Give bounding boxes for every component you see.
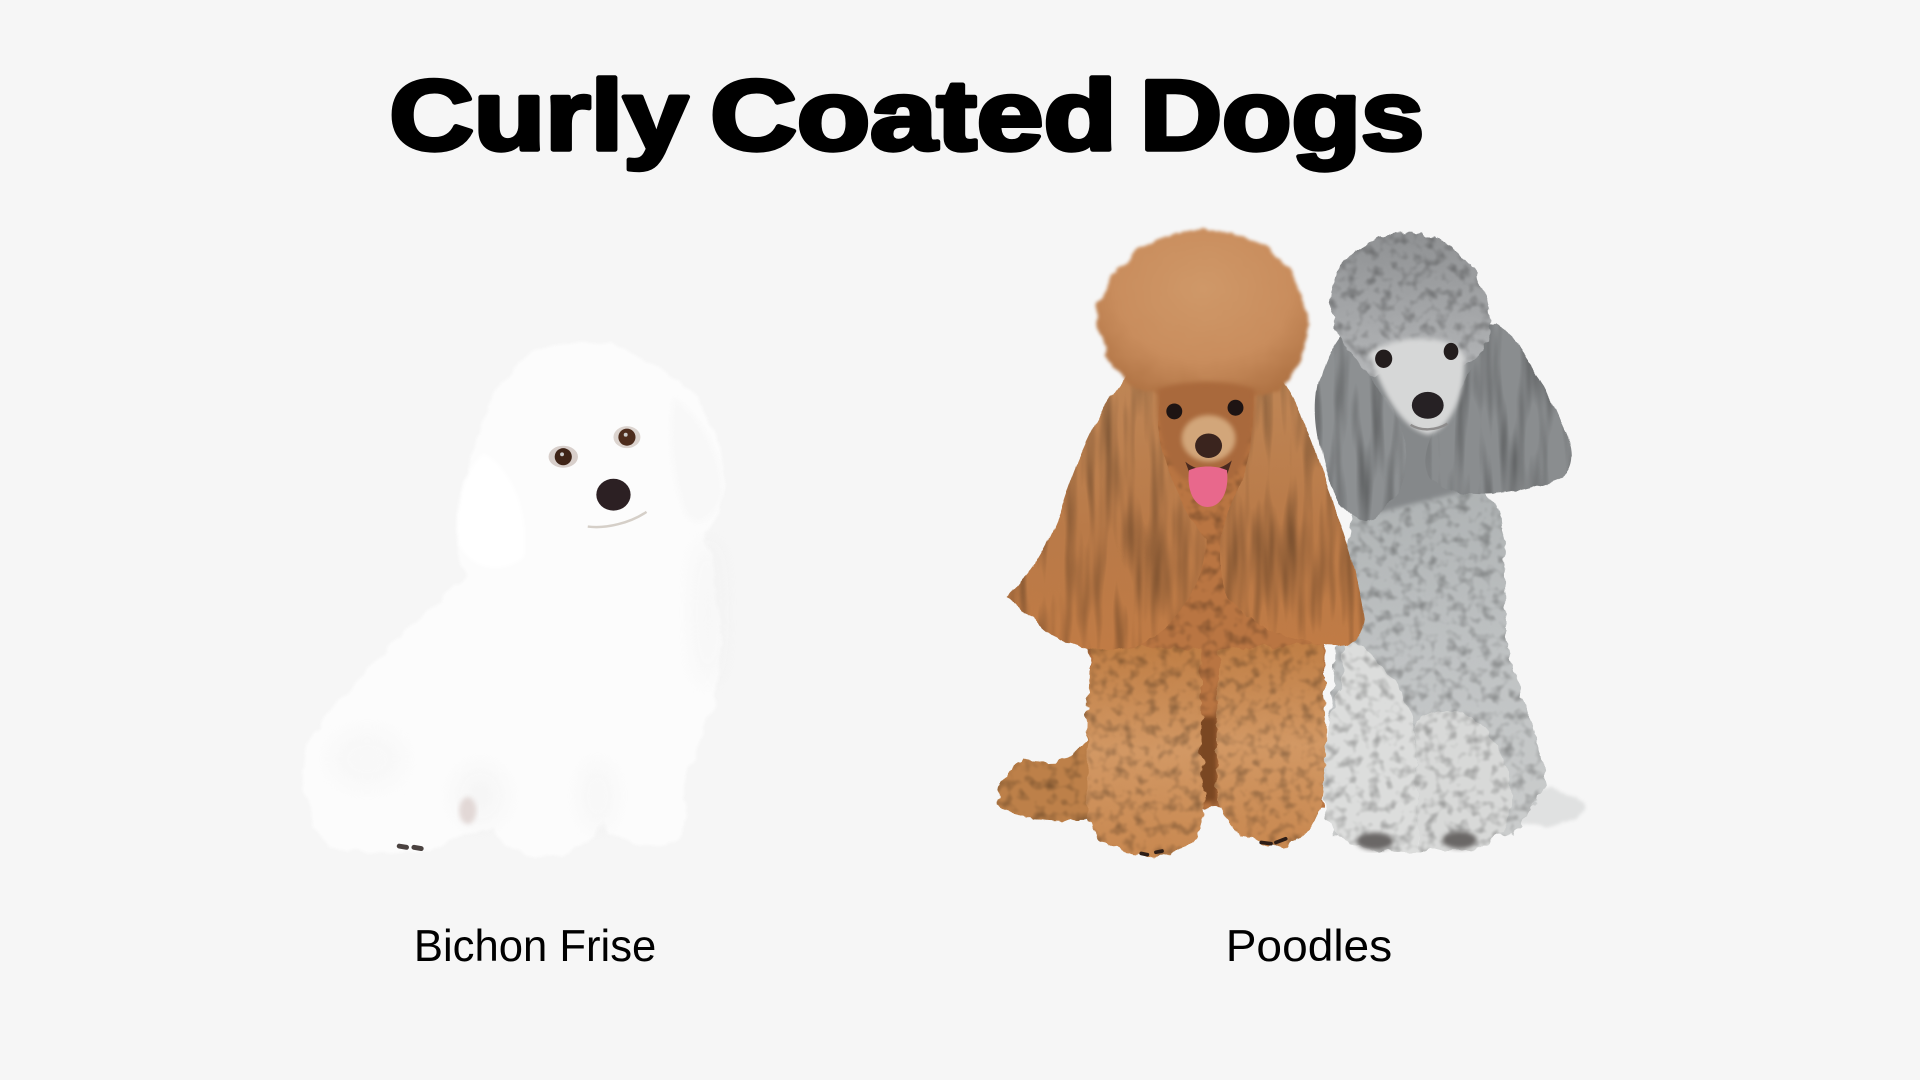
bichon right ear bbox=[671, 398, 723, 521]
brown poodle nose bbox=[1195, 433, 1222, 458]
grey poodle mouth bbox=[1411, 424, 1447, 429]
label: Bichon Frise: Bichon Frise bbox=[414, 922, 656, 971]
bichon belly shadow bbox=[459, 797, 476, 824]
grey poodle paws bbox=[1357, 831, 1477, 850]
bichon eyes bbox=[549, 426, 640, 468]
grey poodle eyes bbox=[1375, 343, 1458, 368]
brown poodle gap between legs bbox=[1198, 716, 1217, 802]
title: Dogs bbox=[1140, 60, 1424, 171]
brown poodle tongue bbox=[1189, 467, 1227, 507]
title: Coated bbox=[710, 60, 1117, 171]
grey poodle body bbox=[1329, 473, 1545, 835]
bichon nose bbox=[596, 479, 631, 511]
brown poodle left leg bbox=[1087, 647, 1204, 857]
grey poodle nose bbox=[1412, 392, 1444, 419]
photo: brown poodle bbox=[998, 229, 1365, 857]
title: Curly bbox=[389, 60, 688, 171]
brown poodle right ear bbox=[1220, 349, 1365, 646]
grey poodle front leg right bbox=[1416, 710, 1511, 851]
grey poodle front leg left bbox=[1322, 639, 1418, 852]
bichon body silhouette bbox=[304, 342, 725, 857]
brown poodle right leg bbox=[1217, 643, 1325, 847]
brown poodle head top bbox=[1098, 229, 1308, 400]
brown poodle mouth bbox=[1185, 460, 1232, 475]
bichon left ear bbox=[457, 453, 525, 568]
brown poodle muzzle bbox=[1182, 415, 1236, 462]
brown poodle eyes bbox=[1166, 400, 1243, 419]
brown poodle face bbox=[1157, 382, 1255, 480]
title bbox=[389, 60, 1424, 171]
bichon paw toes bbox=[399, 846, 421, 849]
grey poodle head top bbox=[1331, 233, 1491, 375]
grey poodle left ear bbox=[1316, 333, 1406, 522]
bichon mouth bbox=[588, 512, 647, 527]
grey poodle neck underlay bbox=[1347, 343, 1482, 514]
photo: white Bichon Frise dog bbox=[304, 342, 725, 857]
bichon soft fur shading bbox=[331, 539, 716, 828]
photo: grey poodle bbox=[1316, 233, 1582, 852]
brown poodle left ear bbox=[1007, 349, 1206, 651]
grey poodle tail bbox=[1501, 787, 1582, 827]
label: Poodles: Poodles bbox=[1226, 922, 1392, 971]
grey poodle face bbox=[1369, 339, 1465, 435]
brown poodle tail bbox=[998, 722, 1092, 821]
brown poodle chest bbox=[1087, 392, 1325, 808]
grey poodle right ear bbox=[1426, 321, 1572, 494]
brown poodle paw toes bbox=[1141, 839, 1286, 855]
